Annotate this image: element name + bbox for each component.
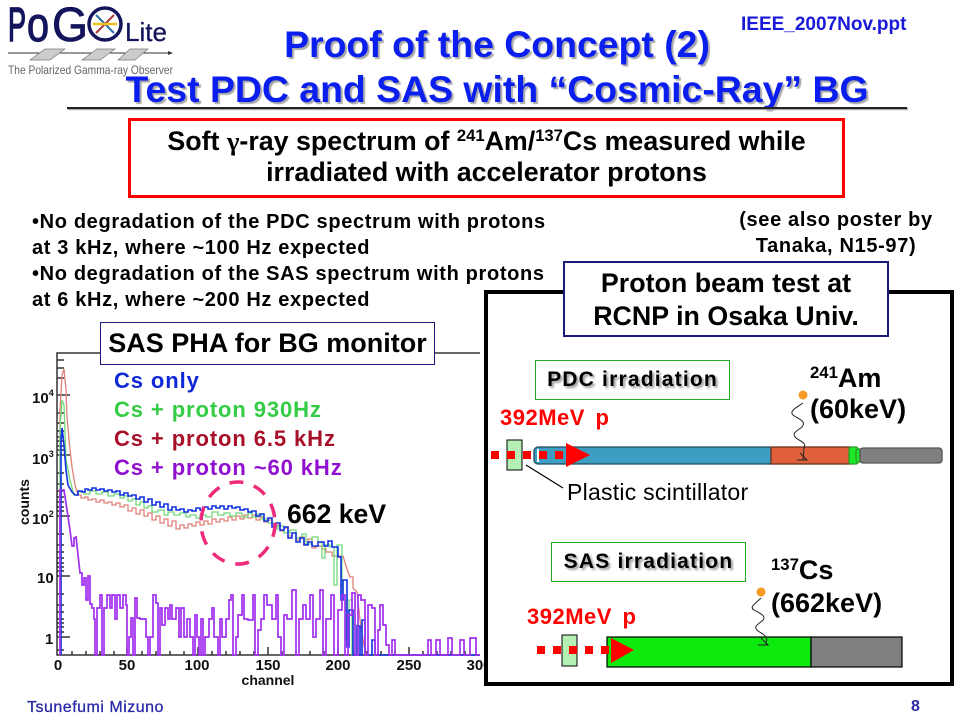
label: PDC irradiation bbox=[535, 360, 730, 400]
callout: soft gamma-ray spectrum bbox=[128, 118, 845, 198]
label: 662 keV: 662 keV bbox=[287, 499, 386, 529]
logo: PoGOLite: Lite bbox=[125, 17, 167, 47]
blue spectrum: Cs only bbox=[61, 428, 480, 655]
PDC scintillator bbox=[507, 440, 522, 470]
x axis labels: 150 bbox=[255, 657, 281, 674]
label: 241Am bbox=[810, 363, 906, 424]
x axis labels: 50 bbox=[119, 657, 135, 674]
x axis labels: 100 bbox=[184, 657, 210, 674]
label: 137Cs bbox=[771, 555, 882, 618]
y axis labels: 4 bbox=[49, 388, 54, 398]
SAS beam arrow bbox=[537, 638, 634, 663]
dashed circle: 662 keV peak bbox=[201, 482, 275, 564]
label: 392MeV p lower: 392MeV p bbox=[527, 604, 636, 629]
y axis labels: 10 bbox=[32, 511, 49, 528]
PDC detector bbox=[534, 447, 942, 464]
legend bbox=[114, 368, 343, 480]
x axis labels: 0 bbox=[54, 657, 62, 674]
heading: proton beam test: Proton beam test at bbox=[601, 268, 851, 298]
text block: findings bbox=[32, 211, 546, 311]
legend: Cs only bbox=[114, 368, 200, 393]
y axis labels: 2 bbox=[49, 509, 54, 519]
title: Test PDC and SAS with “Cosmic-Ray” BG bbox=[125, 68, 869, 110]
note: see also poster: Tanaka, N15-97) bbox=[756, 235, 916, 257]
y axis labels bbox=[32, 388, 54, 648]
label: 241Am: (60keV) bbox=[810, 394, 906, 424]
logo: PoGOLite: G bbox=[52, 0, 88, 52]
PDC beam arrow bbox=[491, 443, 590, 467]
text block: findings: at 3 kHz, where ~100 Hz expected bbox=[32, 237, 370, 259]
y axis labels: 3 bbox=[49, 449, 54, 459]
scintillator leader bbox=[526, 465, 563, 488]
heading: proton beam test: RCNP in Osaka Univ. bbox=[593, 301, 859, 331]
logo: PoGOLite: o bbox=[27, 0, 49, 52]
purple spectrum: 60 kHz bbox=[60, 490, 480, 655]
file name: IEEE_2007Nov.ppt bbox=[741, 14, 906, 35]
y axis title: counts bbox=[16, 479, 32, 525]
x axis labels bbox=[54, 657, 492, 674]
heading: SAS PHA bbox=[100, 322, 435, 365]
axes bbox=[57, 353, 480, 655]
title: Proof of the Concept (2) bbox=[284, 23, 710, 65]
SAS detector bbox=[607, 637, 902, 667]
green spectrum: 930 Hz bbox=[60, 400, 358, 655]
y axis labels: 10 bbox=[32, 451, 49, 468]
text block: findings: •No degradation of the SAS spectrum with protons bbox=[32, 263, 545, 285]
label: 137Cs: 137Cs bbox=[771, 555, 833, 585]
heading: proton beam test bbox=[563, 261, 889, 337]
note: see also poster: (see also poster by bbox=[739, 209, 933, 231]
footer: author: Tsunefumi Mizuno bbox=[27, 699, 164, 716]
x axis title: channel bbox=[242, 672, 294, 688]
footer: page number: 8 bbox=[911, 698, 920, 715]
logo: PoGOLite bbox=[8, 0, 173, 77]
diagram: PDC and SAS detectors bbox=[491, 390, 943, 668]
title bbox=[125, 23, 869, 112]
heading: SAS PHA: SAS PHA for BG monitor bbox=[108, 328, 427, 358]
panel: proton beam test bbox=[484, 290, 954, 686]
legend: Cs + proton 930Hz bbox=[114, 397, 322, 422]
red spectrum: 6.5 kHz bbox=[60, 369, 366, 655]
title rule bbox=[67, 107, 907, 109]
x axis labels: 200 bbox=[325, 657, 351, 674]
chart: SAS pulse height spectrum bbox=[16, 352, 484, 688]
note: see also poster bbox=[739, 209, 933, 257]
x axis labels: 250 bbox=[396, 657, 422, 674]
label: plastic scintillator: Plastic scintillator bbox=[567, 479, 748, 505]
label: SAS irradiation bbox=[551, 542, 746, 582]
y axis labels: 10 bbox=[37, 570, 54, 587]
legend: Cs + proton 6.5 kHz bbox=[114, 426, 336, 451]
logo: PoGOLite: P bbox=[8, 0, 26, 52]
callout: soft gamma-ray spectrum: irradiated with accelerator protons bbox=[266, 157, 707, 187]
callout: soft gamma-ray spectrum: Soft γ-ray spectrum of 241Am/137Cs measured while bbox=[167, 126, 806, 156]
y axis labels: 10 bbox=[32, 390, 49, 407]
Am source and photon bbox=[792, 390, 808, 460]
label: 241Am: 241Am bbox=[810, 363, 881, 393]
legend: Cs + proton ~60 kHz bbox=[114, 455, 343, 480]
text block: findings: at 6 kHz, where ~200 Hz expected bbox=[32, 289, 370, 311]
label: PDC irradiation: PDC irradiation bbox=[547, 368, 718, 391]
label: 137Cs: (662keV) bbox=[771, 588, 882, 618]
y axis labels: 1 bbox=[45, 631, 53, 648]
text block: findings: •No degradation of the PDC spectrum with protons bbox=[32, 211, 546, 233]
label: 392MeV p upper: 392MeV p bbox=[500, 405, 610, 430]
Cs source and photon bbox=[752, 588, 768, 645]
SAS scintillator bbox=[562, 635, 577, 666]
label: SAS irradiation: SAS irradiation bbox=[564, 550, 733, 573]
